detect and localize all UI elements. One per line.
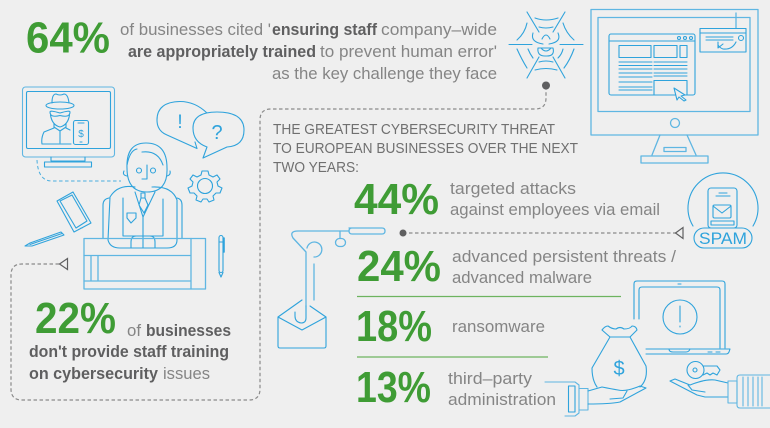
icon: hacker on small monitor bbox=[22, 87, 114, 167]
statistic: 13 percent: 13% bbox=[356, 364, 431, 412]
connector: dashed path from training statistic to spider bbox=[11, 85, 546, 400]
icon: hacker on small monitor: $ bbox=[78, 129, 84, 140]
icon: tablet bbox=[57, 192, 91, 232]
marker: connector triangle bbox=[60, 258, 68, 270]
icon: large monitor with browser window bbox=[591, 10, 758, 163]
text block: key challenge: to prevent human error' bbox=[320, 43, 497, 61]
statistic: 44 percent: 44% bbox=[354, 176, 439, 224]
connector: dashed line to spam icon bbox=[403, 232, 676, 234]
label: persistent threats: advanced persistent threats / bbox=[452, 248, 676, 266]
icon: money bag on hand bbox=[545, 326, 646, 416]
icon: spam phone: SPAM bbox=[699, 229, 747, 248]
statistic: 64 percent: 64% bbox=[26, 14, 110, 62]
text block: key challenge: are appropriately trained bbox=[128, 43, 316, 61]
heading: greatest threat: TWO YEARS: bbox=[273, 159, 359, 176]
marker: spam connector triangle bbox=[676, 228, 683, 238]
statistic: 18 percent: 18% bbox=[356, 303, 432, 351]
text block: key challenge bbox=[120, 21, 497, 83]
text block: staff training: businesses bbox=[146, 322, 231, 340]
heading: greatest threat bbox=[273, 121, 578, 176]
text block: staff training: of bbox=[127, 322, 141, 340]
text block: staff training: don't provide staff training bbox=[29, 343, 229, 361]
text block: key challenge: ensuring staff bbox=[272, 21, 377, 39]
heading: greatest threat: TO EUROPEAN BUSINESSES OVER THE NEXT bbox=[273, 140, 578, 157]
heading: greatest threat: THE GREATEST CYBERSECURITY THREAT bbox=[273, 121, 555, 138]
label: third-party: administration bbox=[448, 391, 556, 409]
icon: speech bubbles bbox=[157, 102, 244, 158]
icon: money bag on hand: $ bbox=[613, 358, 625, 380]
label: targeted attacks: targeted attacks bbox=[450, 180, 576, 198]
text block: key challenge: company–wide bbox=[381, 21, 497, 39]
icon: pen bbox=[219, 236, 224, 277]
icon: pencil bbox=[25, 232, 64, 246]
label: third-party bbox=[448, 370, 556, 409]
label: persistent threats: advanced malware bbox=[452, 269, 592, 287]
marker: connector dot bbox=[542, 82, 550, 90]
statistic: 22 percent: 22% bbox=[35, 295, 116, 343]
text block: staff training: on cybersecurity bbox=[29, 365, 159, 383]
label: third-party: third–party bbox=[448, 370, 533, 388]
text block: key challenge: as the key challenge they face bbox=[272, 65, 497, 83]
label: targeted attacks: against employees via email bbox=[450, 201, 660, 219]
icon: speech bubbles: ? bbox=[211, 122, 223, 144]
statistic: 24 percent: 24% bbox=[357, 243, 441, 291]
icon: laptop with alert bbox=[634, 281, 730, 354]
icon: spam phone bbox=[688, 173, 758, 248]
icon: speech bubbles: ! bbox=[177, 112, 183, 133]
marker: spam connector dot bbox=[400, 230, 406, 236]
connector: blue dashed line from monitor to person bbox=[37, 160, 121, 181]
text block: staff training: issues bbox=[163, 365, 210, 383]
label: persistent threats bbox=[452, 248, 676, 287]
icon: key on hand bbox=[670, 362, 770, 408]
label: targeted attacks bbox=[450, 180, 660, 219]
icon: robot arm with hook and envelope bbox=[278, 228, 385, 348]
label: ransomware: ransomware bbox=[452, 318, 545, 336]
illustration: person at desk bbox=[84, 143, 206, 289]
text block: staff training bbox=[29, 322, 231, 383]
icon: gear bbox=[188, 171, 222, 202]
icon: spider web bbox=[509, 12, 583, 78]
text block: key challenge: of businesses cited ' bbox=[120, 21, 271, 39]
